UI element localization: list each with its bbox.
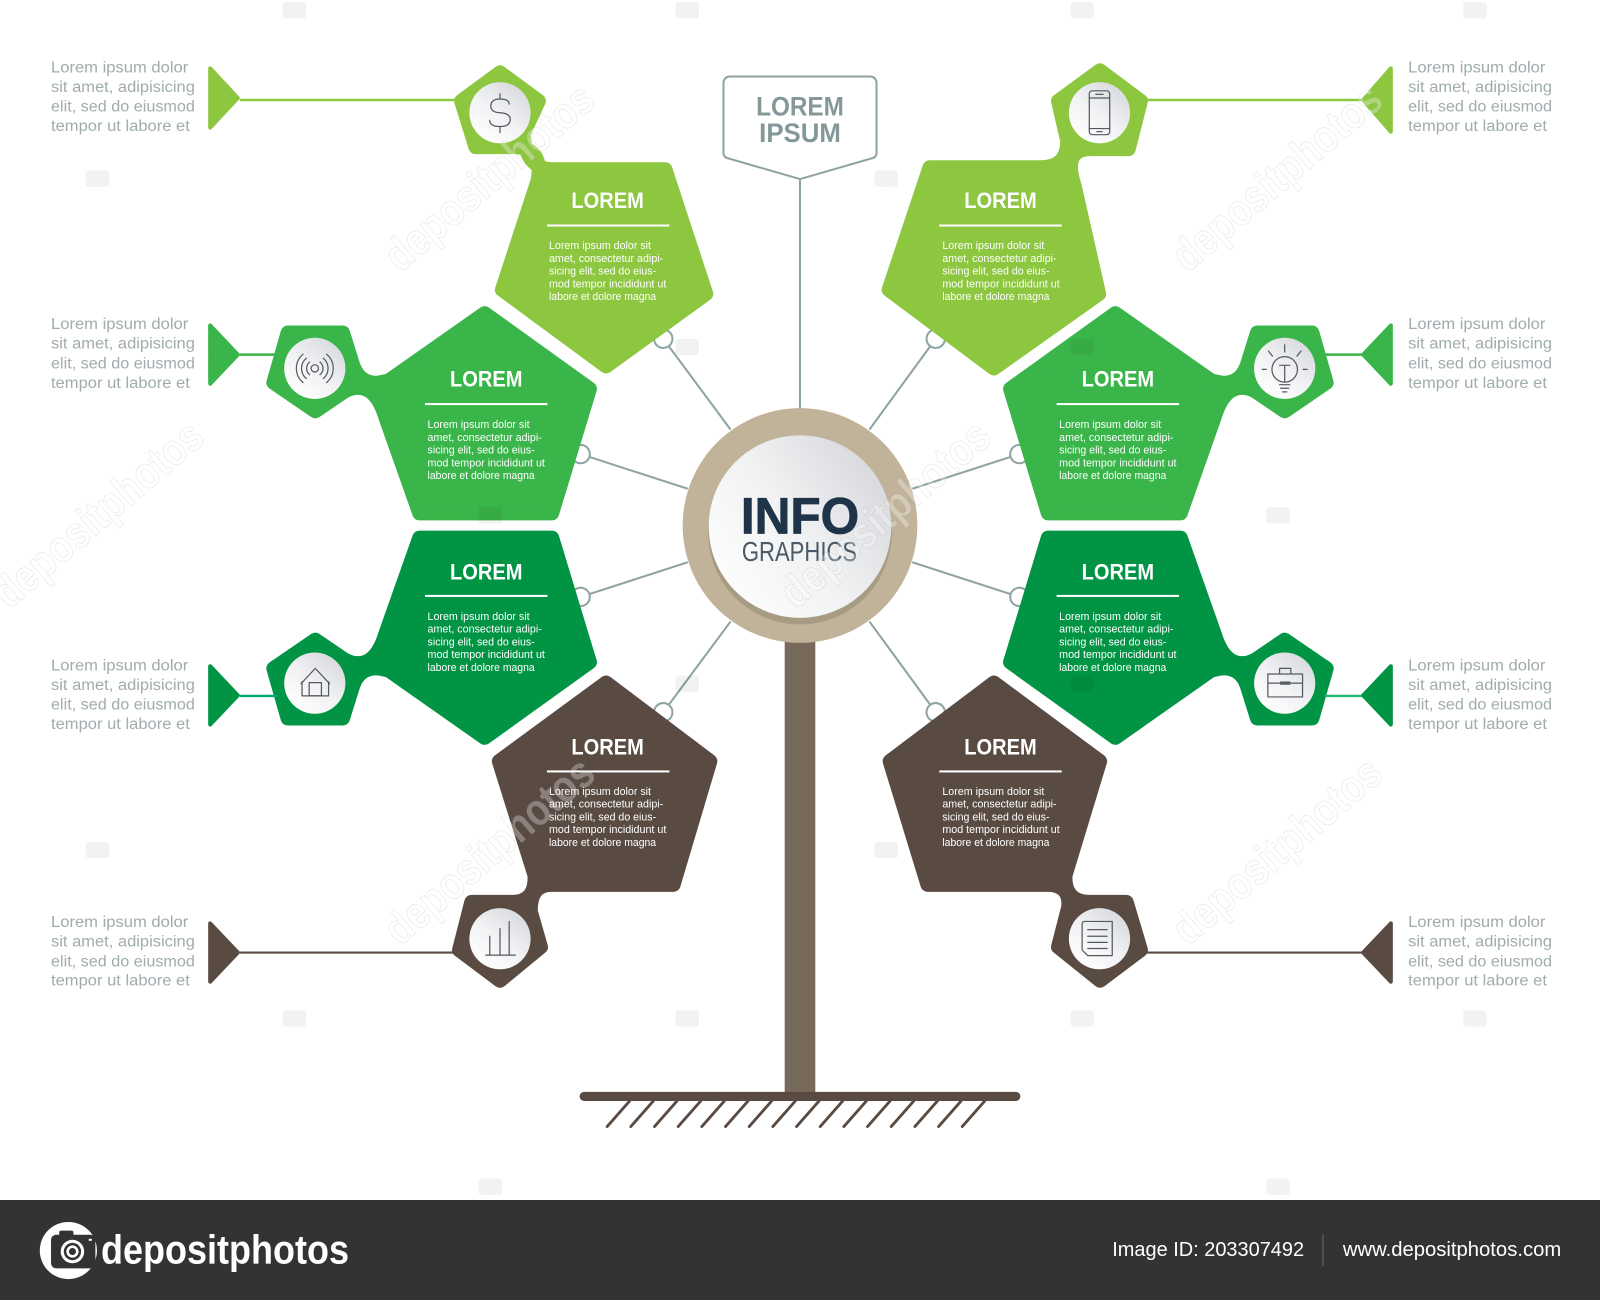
icon disc xyxy=(284,653,345,714)
panel text: sicing elit, sed do eius- xyxy=(942,811,1050,823)
side text: right row 3: tempor ut labore et xyxy=(1408,716,1548,733)
panel shape xyxy=(889,70,1141,368)
icon: radio waves xyxy=(296,354,333,383)
panel text: labore et dolore magna xyxy=(428,662,535,674)
icon: light bulb xyxy=(1262,345,1307,392)
panel text xyxy=(1059,419,1177,482)
icon disc xyxy=(469,908,531,969)
panel: bottom left brown xyxy=(459,683,710,981)
side text: left row 1: elit, sed do eiusmod xyxy=(51,99,195,116)
icon disc xyxy=(284,338,345,399)
panel rule xyxy=(547,770,669,772)
panel text: labore et dolore magna xyxy=(1059,470,1166,482)
tag outline xyxy=(723,77,877,179)
panel rule xyxy=(939,224,1062,227)
panel text: labore et dolore magna xyxy=(1059,662,1166,674)
side text: right row 4: Lorem ipsum dolor xyxy=(1408,914,1545,931)
side text: right row 3: elit, sed do eiusmod xyxy=(1408,697,1552,714)
panel text: amet, consectetur adipi- xyxy=(942,253,1057,265)
panel text xyxy=(1059,611,1177,674)
side text: left row 3: tempor ut labore et xyxy=(51,716,190,733)
panel shape xyxy=(1010,313,1327,513)
panel text: labore et dolore magna xyxy=(428,470,535,482)
panel text: Lorem ipsum dolor sit xyxy=(1059,419,1161,431)
side text: left row 4: elit, sed do eiusmod xyxy=(51,953,195,970)
infographic canvas: depositphotos xyxy=(769,410,1000,618)
panel text: labore et dolore magna xyxy=(549,837,656,849)
panel text: mod tempor incididunt ut xyxy=(549,278,666,290)
panel shape xyxy=(273,313,590,513)
image id: Image ID: 203307492 xyxy=(1112,1239,1304,1261)
side text: left row 4 xyxy=(51,914,195,990)
panel text: Lorem ipsum dolor sit xyxy=(549,240,651,252)
hub title: INFO xyxy=(741,488,859,545)
arrow: right row 4 xyxy=(1145,923,1391,982)
side text: right row 4 xyxy=(1408,914,1552,990)
icon: briefcase xyxy=(1268,668,1303,697)
side text: left row 4: tempor ut labore et xyxy=(51,973,190,990)
panel text xyxy=(942,786,1060,849)
panel rule xyxy=(939,770,1062,772)
footer divider xyxy=(1322,1235,1323,1266)
panel text: sicing elit, sed do eius- xyxy=(942,266,1050,278)
panel text: amet, consectetur adipi- xyxy=(1059,624,1174,636)
panel title: LOREM xyxy=(1082,367,1154,392)
footer bar xyxy=(0,1200,1600,1300)
panel text: mod tempor incididunt ut xyxy=(428,457,545,469)
side text: right row 1: tempor ut labore et xyxy=(1408,118,1548,135)
footer logo icon xyxy=(40,1222,97,1279)
side text: right row 2: sit amet, adipisicing xyxy=(1408,335,1552,352)
infographic canvas: depositphotos xyxy=(1161,746,1392,955)
panel text: labore et dolore magna xyxy=(549,291,656,303)
panel text: Lorem ipsum dolor sit xyxy=(428,611,530,623)
icon: house xyxy=(301,668,330,696)
panel rule xyxy=(547,224,669,227)
footer background xyxy=(0,1200,1600,1300)
panel text: amet, consectetur adipi- xyxy=(549,799,664,811)
panel text: sicing elit, sed do eius- xyxy=(1059,445,1167,457)
side text: right row 3: sit amet, adipisicing xyxy=(1408,677,1552,694)
hub shadow xyxy=(708,441,892,624)
side text: right row 1: sit amet, adipisicing xyxy=(1408,79,1552,96)
panel shape xyxy=(273,538,590,738)
side text: left row 3 xyxy=(51,657,195,733)
panel text: amet, consectetur adipi- xyxy=(428,432,542,444)
panel text: mod tempor incididunt ut xyxy=(942,278,1060,290)
side text: right row 4: elit, sed do eiusmod xyxy=(1408,953,1552,970)
panel title: LOREM xyxy=(1082,560,1154,585)
hub ring xyxy=(683,408,917,643)
panel text: mod tempor incididunt ut xyxy=(549,824,666,836)
panel text: mod tempor incididunt ut xyxy=(1059,649,1177,661)
panel shape xyxy=(890,683,1141,981)
panel title: LOREM xyxy=(964,188,1037,213)
panel rule xyxy=(425,595,547,597)
panel: lower right dark green xyxy=(1010,538,1327,738)
tag text second line: IPSUM xyxy=(759,118,841,148)
arrow: right row 1 xyxy=(1145,68,1391,132)
panel text: amet, consectetur adipi- xyxy=(942,799,1057,811)
panel text: mod tempor incididunt ut xyxy=(1059,457,1177,469)
icon disc xyxy=(1069,908,1130,969)
infographic canvas: depositphotos xyxy=(1161,73,1392,281)
icon: dollar xyxy=(490,94,510,133)
panel rule xyxy=(1057,595,1179,597)
side text: left row 2: sit amet, adipisicing xyxy=(51,335,195,352)
ground bar xyxy=(580,1092,1020,1101)
panel text: mod tempor incididunt ut xyxy=(428,649,545,661)
arrow: right row 3 xyxy=(1324,666,1391,724)
side text: right row 2: elit, sed do eiusmod xyxy=(1408,355,1552,372)
arrow: left row 2 xyxy=(210,326,278,384)
icon: document xyxy=(1082,921,1112,956)
side text: left row 2: tempor ut labore et xyxy=(51,375,190,392)
side text: left row 4: sit amet, adipisicing xyxy=(51,933,195,950)
footer logo wordmark: depositphotos xyxy=(101,1226,349,1272)
panel text xyxy=(942,240,1060,303)
side text: left row 1: Lorem ipsum dolor xyxy=(51,59,188,76)
panel title: LOREM xyxy=(964,735,1037,760)
panel text: Lorem ipsum dolor sit xyxy=(942,786,1044,798)
website url: www.depositphotos.com xyxy=(1342,1239,1561,1261)
panel text: mod tempor incididunt ut xyxy=(942,824,1060,836)
panel text: labore et dolore magna xyxy=(942,837,1050,849)
side text: left row 2: Lorem ipsum dolor xyxy=(51,316,188,333)
side text: left row 4: Lorem ipsum dolor xyxy=(51,914,188,931)
panel text: amet, consectetur adipi- xyxy=(1059,432,1174,444)
tag text: LOREM xyxy=(756,91,844,121)
icon disc xyxy=(469,82,531,143)
side text: right row 1 xyxy=(1408,59,1552,135)
panel: top left light green xyxy=(461,72,706,366)
panel text: Lorem ipsum dolor sit xyxy=(428,419,530,431)
panel text xyxy=(549,786,666,849)
panel: upper left mid green xyxy=(273,313,590,513)
panel title: LOREM xyxy=(450,367,522,392)
panel text xyxy=(428,611,545,674)
side text: right row 2: tempor ut labore et xyxy=(1408,375,1548,392)
icon: bar chart xyxy=(486,921,515,955)
panel text: labore et dolore magna xyxy=(942,291,1050,303)
panel: lower left dark green xyxy=(273,538,590,738)
panel shape xyxy=(459,683,710,981)
panel text: Lorem ipsum dolor sit xyxy=(1059,611,1161,623)
side text: left row 1 xyxy=(51,59,195,135)
icon disc xyxy=(1069,82,1130,143)
panel text: Lorem ipsum dolor sit xyxy=(549,786,651,798)
panel text: sicing elit, sed do eius- xyxy=(428,445,535,457)
panel: upper right mid green xyxy=(1010,313,1327,513)
panel title: LOREM xyxy=(450,560,522,585)
side text: right row 3: Lorem ipsum dolor xyxy=(1408,657,1545,674)
connectors from hub to panels xyxy=(571,330,1029,721)
arrow: left row 4 xyxy=(210,923,456,982)
panel text: Lorem ipsum dolor sit xyxy=(942,240,1044,252)
ground hatching xyxy=(607,1101,985,1127)
side text: right row 1: elit, sed do eiusmod xyxy=(1408,99,1552,116)
side text: left row 3: Lorem ipsum dolor xyxy=(51,657,188,674)
panel: top right light green xyxy=(889,70,1141,368)
side text: left row 2 xyxy=(51,316,195,392)
hub disc xyxy=(709,435,891,618)
panel text xyxy=(428,419,545,482)
panel text xyxy=(549,240,666,303)
side text: left row 1: tempor ut labore et xyxy=(51,118,190,135)
side text: right row 3 xyxy=(1408,657,1552,733)
panel rule xyxy=(1057,403,1179,405)
panel text: amet, consectetur adipi- xyxy=(428,624,542,636)
panel shape xyxy=(461,72,706,366)
trunk xyxy=(785,633,815,1094)
infographic canvas: depositphotos xyxy=(374,73,604,281)
side text: right row 4: tempor ut labore et xyxy=(1408,973,1548,990)
arrow: right row 2 xyxy=(1324,326,1391,384)
header tag connector line xyxy=(799,180,801,410)
infographic canvas: depositphotos xyxy=(374,746,604,955)
arrow: left row 1 xyxy=(210,68,456,128)
icon disc xyxy=(1254,338,1315,399)
panel: bottom right brown xyxy=(890,683,1141,981)
panel text: sicing elit, sed do eius- xyxy=(549,266,657,278)
panel text: sicing elit, sed do eius- xyxy=(549,811,657,823)
icon: phone xyxy=(1089,91,1110,135)
side text: left row 3: sit amet, adipisicing xyxy=(51,677,195,694)
panel text: sicing elit, sed do eius- xyxy=(1059,636,1167,648)
side text: left row 1: sit amet, adipisicing xyxy=(51,79,195,96)
panel rule xyxy=(425,403,547,405)
panel title: LOREM xyxy=(571,188,644,213)
side text: right row 2 xyxy=(1408,316,1552,392)
panel shape xyxy=(1010,538,1327,738)
panel title: LOREM xyxy=(571,735,644,760)
side text: left row 2: elit, sed do eiusmod xyxy=(51,355,195,372)
icon disc xyxy=(1254,653,1315,714)
panel text: amet, consectetur adipi- xyxy=(549,253,664,265)
panel text: sicing elit, sed do eius- xyxy=(428,636,535,648)
side text: right row 1: Lorem ipsum dolor xyxy=(1408,59,1545,76)
side text: right row 4: sit amet, adipisicing xyxy=(1408,933,1552,950)
hub subtitle: GRAPHICS xyxy=(742,536,857,567)
side text: left row 3: elit, sed do eiusmod xyxy=(51,697,195,714)
arrow: left row 3 xyxy=(210,666,278,724)
hub xyxy=(683,408,917,643)
header tag xyxy=(723,77,877,179)
side text: right row 2: Lorem ipsum dolor xyxy=(1408,316,1545,333)
